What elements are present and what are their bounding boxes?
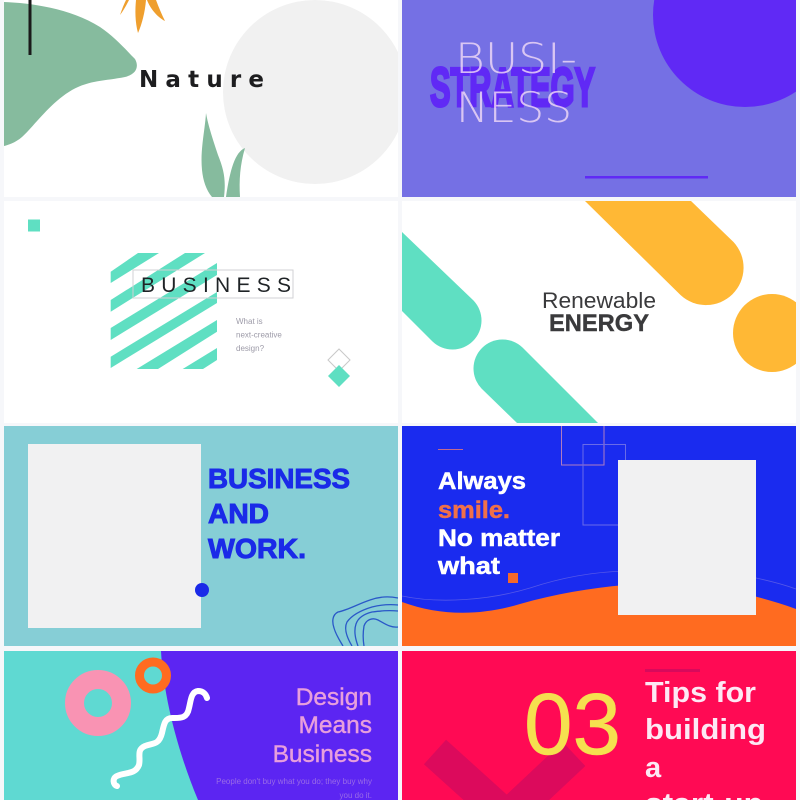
title: BUSINESS AND WORK: WORK. [208,533,306,564]
headline text: Tips for [645,677,756,709]
caption text: you do it. [340,791,372,800]
headline text: Always [438,468,526,495]
thin wave line [402,571,796,600]
yellow circle [733,294,800,372]
headline text [274,687,372,762]
headline text: No matter [438,525,560,552]
teal square [28,220,40,232]
icon: teal diamond [328,365,350,387]
panel: Business stripes slide [4,201,398,423]
blue dot [195,583,209,597]
black vertical line [28,0,32,55]
panel: Nature slide [4,0,407,197]
caption text [216,777,372,800]
headline text: building [645,714,766,746]
title box: BUSINESS: BUSINESS [141,274,291,297]
icon: orange flower [120,0,165,33]
panel: Strategy slide [402,0,800,197]
striped square [111,253,217,369]
number 03: 03 [524,676,621,773]
panel: Always smile slide [402,420,796,646]
panel: Tips slide [402,651,796,800]
headline text: what [437,553,500,580]
panel: Design Means Business slide [4,651,398,800]
headline text: smile. [438,497,510,524]
orange ring [140,662,166,689]
faded check mark [435,752,574,800]
caption text [236,317,282,353]
headline text: Design [296,684,372,711]
title: Renewable ENERGY [544,292,656,332]
teal capsule upper [402,232,481,349]
title: STRATEGY: STRATEGY [430,56,595,118]
pink donut [74,680,122,726]
panel: Business and Work slide [4,426,398,646]
headline text: Business [273,741,372,768]
green leaf blob [4,2,137,146]
title: Renewable ENERGY: Renewable [542,288,656,313]
white squiggle [114,691,207,786]
title: BUSINESS AND WORK: BUSINESS [208,463,350,494]
contour line decoration [333,597,398,646]
purple underline [585,176,708,178]
caption text: People don't buy what you do; they buy why [216,777,372,786]
title: BUSI-NESS: BUSI- [455,34,577,83]
orange wave [402,585,796,646]
title: Nature: Nature [139,67,264,93]
yellow capsule [585,201,744,305]
headline text [437,468,560,580]
headline text [645,677,766,800]
photo placeholder [618,460,756,615]
panel: Renewable Energy slide [402,201,800,423]
outlined squares [562,420,626,525]
purple circle [653,0,800,107]
headline text: a [645,752,662,784]
small accent line [438,449,463,450]
title: BUSINESS AND WORK: AND [208,498,269,529]
title: BUSI-NESS [460,42,575,122]
teal capsule lower [474,340,598,423]
title: BUSINESS AND WORK [208,463,350,564]
orange square [508,573,518,583]
photo placeholder [28,444,201,628]
caption text: next-creative [236,330,282,340]
title: BUSI-NESS: NESS [456,83,572,132]
purple curved region [161,651,398,800]
icon: green grass blades [202,113,245,197]
caption text: design? [236,344,265,353]
accent line [645,669,700,672]
title: Renewable ENERGY: ENERGY [549,310,649,337]
icon: outlined diamond [328,349,350,371]
headline text: Means [298,712,372,739]
caption text: What is [236,317,263,326]
grey circle [223,0,407,184]
